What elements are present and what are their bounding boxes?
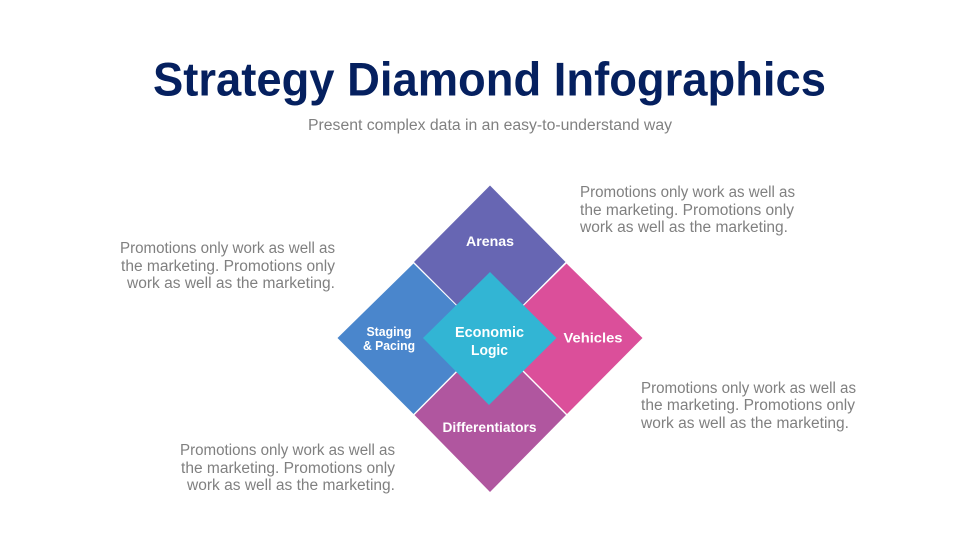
- segment: Arenas: Arenas: [466, 233, 514, 249]
- text block: top right: Promotions only work as well as: [580, 184, 795, 201]
- segment: Differentiators: Differentiators: [442, 419, 537, 435]
- text block: bottom left: [180, 442, 395, 494]
- segment: Vehicles: [491, 264, 642, 414]
- center: Economic Logic: Economic: [455, 325, 524, 341]
- title: Strategy Diamond Infographics: [153, 52, 826, 106]
- text block: top right: [579, 184, 795, 236]
- text block: top right: work as well as the marketing.: [579, 219, 788, 236]
- text block: right: Promotions only work as well as: [641, 380, 856, 397]
- strategy diamond diagram: [338, 186, 642, 492]
- text block: bottom left: work as well as the marketing.: [186, 477, 395, 494]
- text block: left: the marketing. Promotions only: [121, 258, 335, 275]
- segment: Differentiators: [414, 339, 566, 492]
- segment: Staging & Pacing: & Pacing: [363, 339, 415, 353]
- segment: Staging & Pacing: [338, 264, 489, 414]
- text block: left: Promotions only work as well as: [120, 240, 335, 257]
- text block: top right: the marketing. Promotions only: [580, 202, 794, 219]
- text block: right: work as well as the marketing.: [640, 415, 849, 432]
- text block: left: [120, 240, 335, 292]
- segment: Arenas: [414, 186, 566, 338]
- text block: right: [640, 380, 856, 432]
- text block: bottom left: Promotions only work as well as: [180, 442, 395, 459]
- segment: Staging & Pacing: Staging: [366, 325, 412, 339]
- text block: left: work as well as the marketing.: [126, 275, 335, 292]
- segment: Vehicles: Vehicles: [564, 330, 623, 346]
- text block: right: the marketing. Promotions only: [641, 397, 855, 414]
- center: Economic Logic: Logic: [471, 343, 508, 359]
- subtitle: Present complex data in an easy-to-understand way: [308, 117, 672, 134]
- center: Economic Logic: [423, 272, 556, 405]
- text block: bottom left: the marketing. Promotions only: [181, 460, 395, 477]
